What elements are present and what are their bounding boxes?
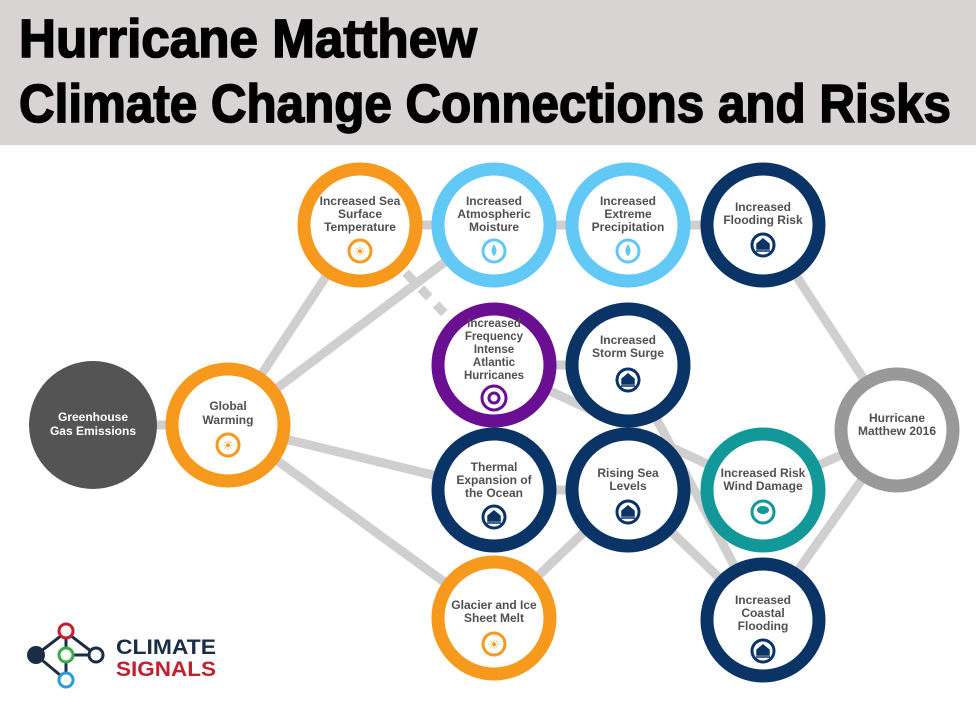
node: glacier and ice sheet melt xyxy=(438,562,550,674)
node: sea surface temperature: Temperature xyxy=(324,220,396,234)
node: wind damage: Wind Damage xyxy=(723,479,803,493)
title: Hurricane Matthew xyxy=(19,9,478,69)
logo: climate signals: SIGNALS xyxy=(116,658,216,681)
node: sea surface temperature xyxy=(304,169,416,281)
node: frequency intense atlantic hurricanes: Hurricanes xyxy=(464,370,524,382)
node: coastal flooding xyxy=(707,564,819,676)
node: global warming: Global xyxy=(209,399,247,413)
node: hurricane matthew 2016 xyxy=(841,374,953,486)
node: glacier and ice sheet melt: Glacier and Ice xyxy=(451,598,537,612)
node: extreme precipitation: Extreme xyxy=(604,207,652,221)
node: rising sea levels xyxy=(572,434,684,546)
node: coastal flooding: Coastal xyxy=(741,606,785,620)
node: storm surge: Storm Surge xyxy=(592,346,664,360)
node: sea surface temperature: Increased Sea xyxy=(320,194,401,208)
node: coastal flooding: Increased xyxy=(735,593,791,607)
node: greenhouse gas emissions: Gas Emissions xyxy=(50,424,136,438)
node: thermal expansion xyxy=(438,434,550,546)
node: greenhouse gas emissions xyxy=(29,361,157,489)
node: storm surge: Increased xyxy=(600,333,656,347)
node: sea surface temperature: ☀ xyxy=(354,244,366,259)
node: thermal expansion: Thermal xyxy=(471,460,517,474)
node: frequency intense atlantic hurricanes: Intense xyxy=(474,344,514,356)
node: thermal expansion: the Ocean xyxy=(465,486,523,500)
title xyxy=(19,9,951,134)
node: extreme precipitation xyxy=(572,169,684,281)
node: flooding risk xyxy=(707,169,819,281)
node: frequency intense atlantic hurricanes: Increased xyxy=(467,318,521,330)
node: sea surface temperature: Surface xyxy=(338,207,382,221)
node: greenhouse gas emissions: Greenhouse xyxy=(58,410,128,424)
node: flooding risk: Flooding Risk xyxy=(723,213,803,227)
node: flooding risk: Increased xyxy=(735,200,791,214)
node: rising sea levels: Levels xyxy=(609,479,647,493)
connector lines xyxy=(93,225,897,620)
node: wind damage: Increased Risk xyxy=(721,466,806,480)
node: glacier and ice sheet melt: Sheet Melt xyxy=(464,611,524,625)
node: coastal flooding: Flooding xyxy=(738,619,788,633)
node: hurricane matthew 2016: Matthew 2016 xyxy=(858,424,936,438)
node: atmospheric moisture: Increased xyxy=(466,194,522,208)
node: extreme precipitation: Increased xyxy=(600,194,656,208)
node: global warming: ☀ xyxy=(222,438,234,453)
node: atmospheric moisture: Atmospheric xyxy=(457,207,531,221)
header band xyxy=(0,0,976,145)
node: rising sea levels: Rising Sea xyxy=(597,466,659,480)
node: thermal expansion: Expansion of xyxy=(456,473,533,487)
node: frequency intense atlantic hurricanes: Frequency xyxy=(465,331,524,343)
node: extreme precipitation: Precipitation xyxy=(592,220,664,234)
node: global warming: Warming xyxy=(203,413,253,427)
node: wind damage xyxy=(707,434,819,546)
node: hurricane matthew 2016: Hurricane xyxy=(869,411,925,425)
node: atmospheric moisture: Moisture xyxy=(469,220,519,234)
node: frequency intense atlantic hurricanes xyxy=(438,309,550,421)
node: frequency intense atlantic hurricanes: Atlantic xyxy=(473,357,516,369)
node: global warming xyxy=(172,369,284,481)
logo: climate signals xyxy=(27,624,216,687)
node: glacier and ice sheet melt: ☀ xyxy=(488,637,500,652)
logo: climate signals: CLIMATE xyxy=(116,636,216,659)
node: atmospheric moisture xyxy=(438,169,550,281)
node: storm surge xyxy=(572,309,684,421)
